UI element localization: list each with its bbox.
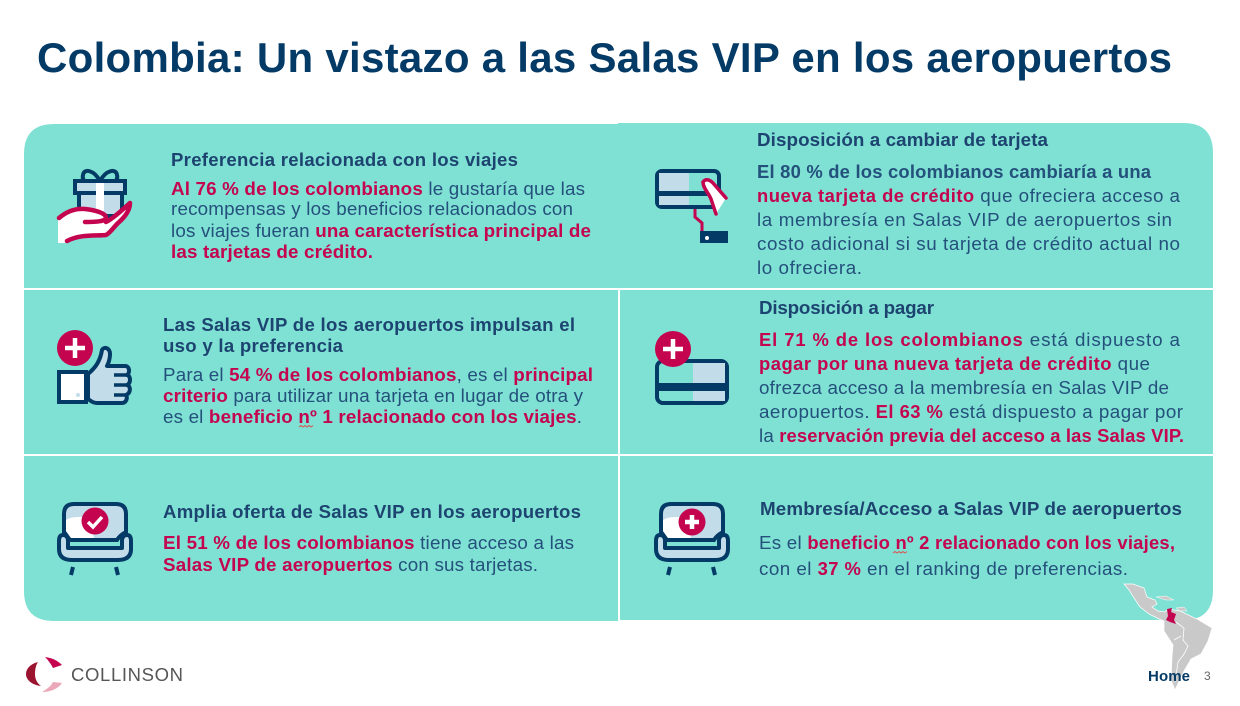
heading [163,314,575,356]
text block: nueva tarjeta de crédito que ofreciera acceso a [757,185,1181,206]
text block: Es el beneficio nº 2 relacionado con los viajes, [759,532,1175,553]
Colombia [1166,608,1176,624]
heading: Las Salas VIP de los aeropuertos impulsan el [163,314,575,335]
text block [759,329,1184,446]
text block: aeropuertos. El 63 % está dispuesto a pagar por [759,401,1183,422]
text block: El 80 % de los colombianos cambiaría a una [757,161,1152,182]
text block: la reservación previa del acceso a las Salas VIP. [759,425,1184,446]
text block [759,532,1175,579]
heading: Preferencia relacionada con los viajes [171,149,518,170]
logo: Collinson: COLLINSON [71,664,183,685]
title: Colombia: Un vistazo a las Salas VIP en los aeropuertos [37,34,1172,81]
map: Latin America with Colombia highlighted [1124,584,1212,690]
text block: la membresía en Salas VIP de aeropuertos sin [757,209,1172,230]
text block: Salas VIP de aeropuertos con sus tarjetas. [163,554,538,575]
heading: Disposición a pagar [759,297,935,318]
text block: con el 37 % en el ranking de preferencias. [759,558,1128,579]
heading: Amplia oferta de Salas VIP en los aeropuertos [163,501,581,522]
heading: Membresía/Acceso a Salas VIP de aeropuertos [760,498,1182,519]
icon: armchair with check [59,504,131,575]
footer: page number: 3 [1204,669,1211,683]
text block: ofrezca acceso a la membresía en Salas VIP de [759,377,1169,398]
text block: las tarjetas de crédito. [171,241,373,262]
text block [163,364,593,427]
panel: willingness to switch [655,129,1181,278]
text block: costo adicional si su tarjeta de crédito actual no [757,233,1180,254]
logo: Collinson [26,657,183,692]
text block: criterio para utilizar una tarjeta en lugar de otra y [163,385,584,406]
panel: membership and access [656,498,1182,579]
panel: VIP lounges drive use [57,314,593,427]
icon: gift in hand [58,171,130,243]
panel: travel preference [58,149,591,262]
text block: lo ofreciera. [757,257,862,278]
text block [757,161,1181,278]
text block: pagar por una nueva tarjeta de crédito que [759,353,1150,374]
text block: recompensas y los beneficios relacionados con [171,198,573,219]
text block: El 71 % de los colombianos está dispuesto a [759,329,1181,350]
heading: Disposición a cambiar de tarjeta [757,129,1049,150]
text block: Para el 54 % de los colombianos, es el principal [163,364,593,385]
icon: card with plus [655,331,728,403]
heading: uso y la preferencia [163,335,344,356]
icon: thumbs up with plus [57,330,130,403]
text block: El 51 % de los colombianos tiene acceso a las [163,532,574,553]
text block: Al 76 % de los colombianos le gustaría que las [171,178,585,199]
panel: wide lounge offer [59,501,581,575]
icon: card with pointer [655,171,728,243]
text block [171,178,591,262]
text block [163,532,574,575]
footer: home link: Home [1148,668,1190,685]
text block: los viajes fueran una característica principal de [171,220,591,241]
text block: es el beneficio nº 1 relacionado con los viajes. [163,406,582,427]
panel: teal background [24,123,1213,621]
icon: armchair with cross [656,504,728,575]
panel: willingness to pay [655,297,1184,446]
